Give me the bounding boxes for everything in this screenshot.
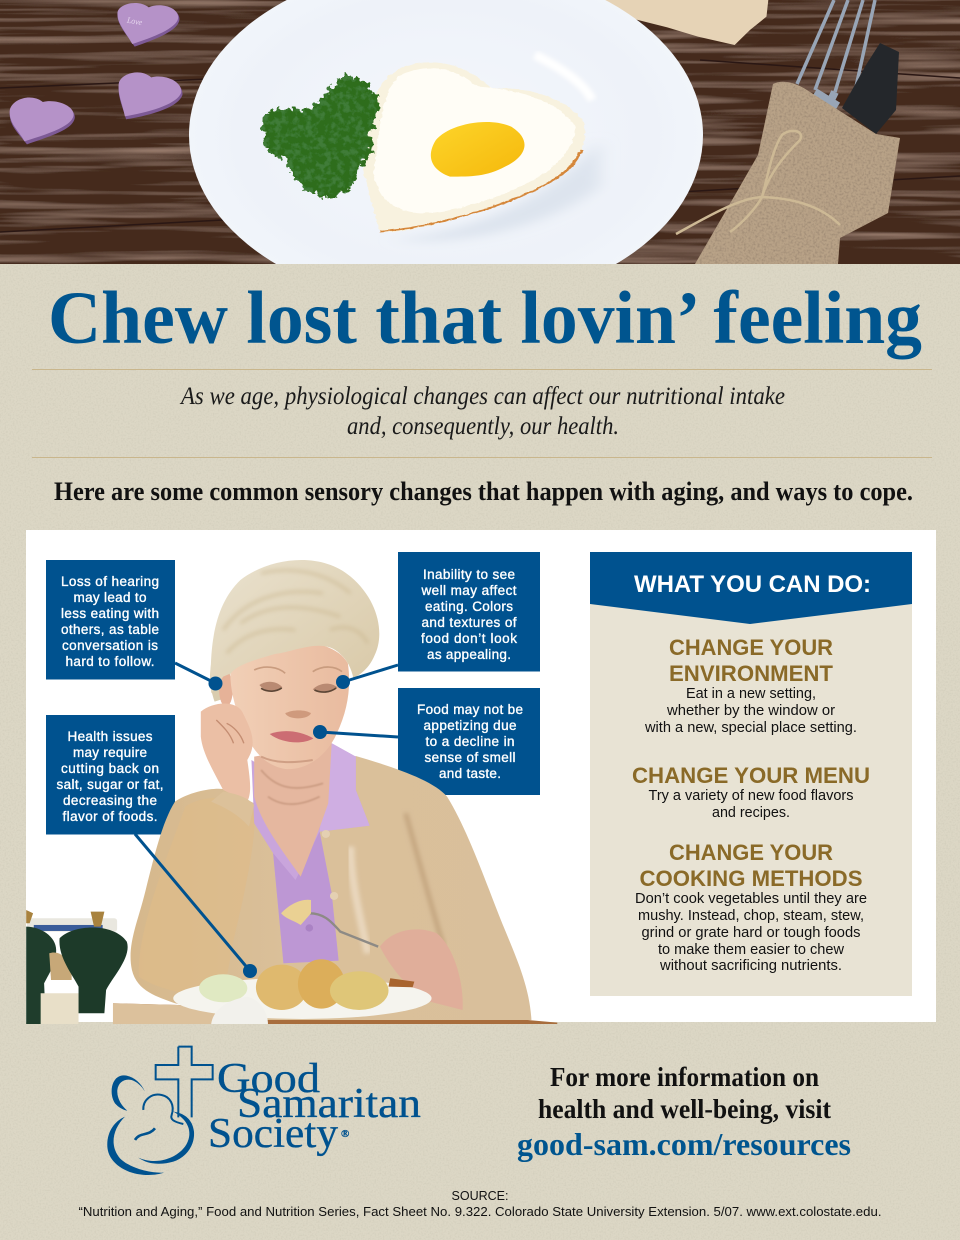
callout: health issues	[46, 715, 175, 834]
knife	[842, 43, 899, 134]
purple heart	[119, 72, 182, 119]
logo wordmark: Good	[217, 1056, 320, 1102]
neck	[254, 743, 332, 877]
ear	[219, 674, 232, 704]
tip: change your environment: with a new, special place setting.	[644, 720, 857, 736]
tip: change your cooking methods: CHANGE YOUR	[669, 840, 833, 865]
connector: vision	[336, 665, 398, 689]
callout: hearing: Loss of hearing	[61, 574, 159, 589]
tip: change your menu: CHANGE YOUR MENU	[632, 763, 870, 788]
source citation: SOURCE:	[452, 1189, 508, 1203]
plate of food	[173, 959, 432, 1024]
connector: smell and taste	[313, 725, 398, 739]
logo wordmark: ®	[341, 1128, 349, 1140]
callout: smell and taste: to a decline in	[426, 734, 514, 749]
tip: change your cooking methods: without sacrificing nutrients.	[659, 958, 842, 974]
callout: health issues: Health issues	[68, 729, 153, 744]
callout: hearing: may lead to	[74, 590, 146, 605]
intro text: As we age, physiological changes can affect our nutritional intake	[179, 383, 785, 410]
callout: hearing	[46, 560, 175, 680]
tip: change your cooking methods: COOKING METHODS	[640, 866, 862, 891]
tip: change your cooking methods: mushy. Instead, chop, steam, stew,	[638, 908, 864, 924]
fried egg white	[364, 62, 585, 232]
callout: vision: food don’t look	[421, 631, 517, 646]
connector: hearing	[175, 663, 222, 690]
logo: Good Samaritan Society	[107, 1047, 421, 1175]
tip: change your environment: Eat in a new setting,	[686, 686, 816, 702]
sleeve shading	[234, 810, 254, 934]
hero photo: heart-shaped egg on a plate on wooden table	[0, 0, 960, 264]
connector: flavor of foods	[135, 834, 257, 978]
callout: smell and taste: appetizing due	[424, 718, 516, 733]
nose and mouth	[285, 710, 311, 718]
callout: vision: and textures of	[422, 615, 517, 630]
tip: change your menu: and recipes.	[712, 805, 790, 821]
tip: change your menu	[632, 763, 870, 821]
tip: change your environment: CHANGE YOUR	[669, 635, 833, 660]
callout: hearing: conversation is	[62, 638, 158, 653]
callout: health issues: decreasing the	[63, 793, 157, 808]
callout: hearing: others, as table	[61, 622, 159, 637]
call to action: For more information on	[550, 1062, 819, 1092]
eyes	[259, 682, 338, 692]
callout: hearing: less eating with	[61, 606, 159, 621]
intro text	[179, 383, 785, 440]
photo: older woman looking at her plate	[26, 560, 557, 1024]
callout: vision: eating. Colors	[425, 599, 513, 614]
paper heart cut-out	[600, 0, 768, 45]
logo wordmark	[208, 1056, 421, 1157]
callout: health issues: flavor of foods.	[62, 809, 158, 824]
tip: change your environment: ENVIRONMENT	[669, 661, 833, 686]
call to action: health and well-being, visit	[538, 1094, 831, 1124]
shadow under egg	[423, 152, 601, 241]
callout: vision: Inability to see	[423, 567, 515, 582]
hair	[211, 560, 379, 693]
tip: change your cooking methods	[635, 840, 867, 974]
fork	[797, 0, 875, 110]
callout: hearing: hard to follow.	[66, 654, 154, 669]
callout: vision: well may affect	[420, 583, 517, 598]
callout: smell and taste	[398, 688, 540, 795]
egg yolk	[431, 122, 525, 177]
call to action: good-sam.com/resources	[517, 1126, 851, 1162]
panel: what you can do	[590, 552, 912, 996]
hair behind ear	[210, 663, 230, 702]
hand holding fork	[380, 929, 463, 1010]
intro text: and, consequently, our health.	[347, 413, 619, 440]
tip: change your environment	[644, 635, 857, 736]
buttons	[322, 830, 330, 838]
tip: change your menu: Try a variety of new food flavors	[648, 788, 854, 804]
callout: health issues: salt, sugar or fat,	[56, 777, 164, 792]
source citation	[78, 1189, 882, 1219]
logo icon: cross and embracing figures	[107, 1047, 213, 1175]
hand on cheek	[201, 704, 253, 802]
callout: health issues: may require	[73, 745, 147, 760]
white plate	[189, 0, 703, 264]
white content panel	[26, 530, 936, 1022]
fork with food	[309, 913, 378, 947]
sleeve cuff	[211, 792, 254, 827]
tip: change your environment: whether by the window or	[666, 703, 835, 719]
purple heart with Love: Love	[125, 15, 143, 27]
table edge	[113, 1003, 557, 1024]
source citation: “Nutrition and Aging,” Food and Nutrition Series, Fact Sheet No. 9.322. Colorado State University Extension. 5/07. www.ext.colostate.edu.	[78, 1204, 882, 1219]
tip: change your cooking methods: Don’t cook vegetables until they are	[635, 891, 867, 907]
face	[230, 641, 349, 769]
purple heart	[10, 98, 75, 144]
tip: change your cooking methods: grind or grate hard or tough foods	[642, 925, 860, 941]
call to action	[517, 1062, 851, 1162]
tip: change your cooking methods: to make them easier to chew	[658, 942, 845, 958]
callout: smell and taste: and taste.	[439, 766, 501, 781]
title: Chew lost that lovin’ feeling	[48, 277, 922, 360]
callout: smell and taste: sense of smell	[424, 750, 516, 765]
cardigan	[131, 756, 531, 1020]
panel header banner: WHAT YOU CAN DO:	[634, 571, 871, 598]
blouse	[251, 743, 370, 963]
purple heart with Love	[117, 3, 179, 47]
salt and pepper shakers	[26, 910, 128, 1024]
subheading: Here are some common sensory changes that happen with aging, and ways to cope.	[54, 477, 913, 506]
callout: smell and taste: Food may not be	[417, 702, 523, 717]
callout: vision: as appealing.	[427, 647, 511, 662]
logo wordmark: Society	[208, 1111, 338, 1157]
logo wordmark: Samaritan	[237, 1081, 421, 1127]
callout: vision	[398, 552, 540, 672]
parsley garnish	[262, 77, 378, 197]
panel header banner	[590, 552, 912, 624]
callout: health issues: cutting back on	[61, 761, 159, 776]
burlap napkin	[676, 82, 900, 264]
